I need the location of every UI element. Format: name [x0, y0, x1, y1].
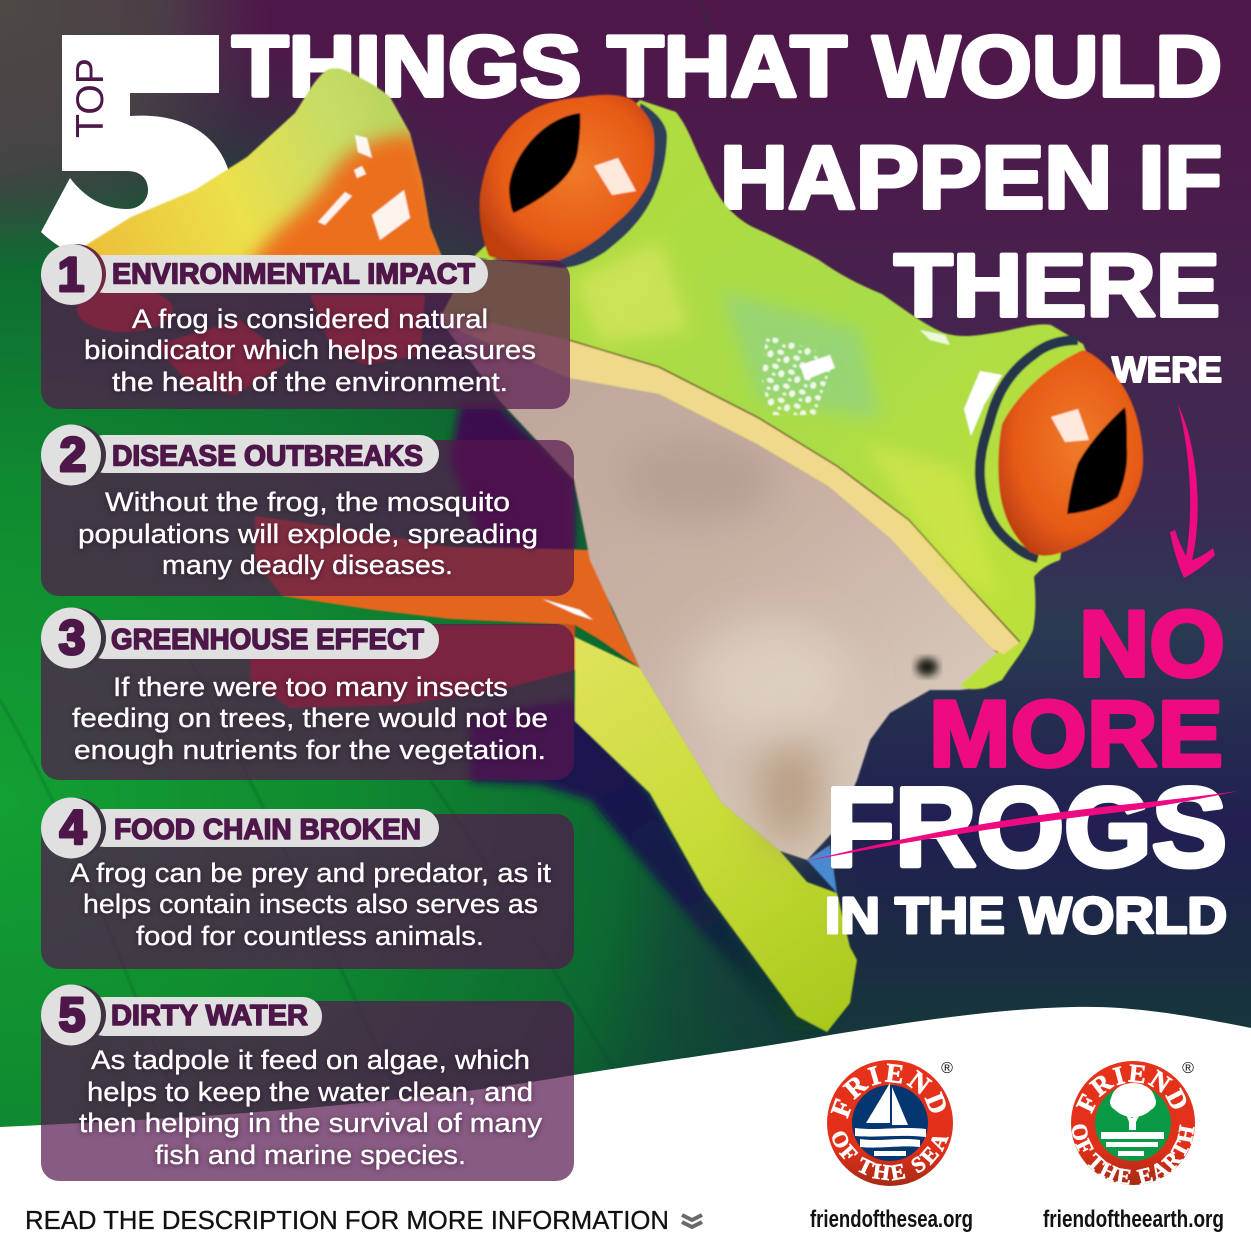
- icon: double chevron: [682, 1215, 702, 1227]
- text 5: helps to keep the water clean, and: [87, 1077, 533, 1107]
- title: [232, 19, 1222, 390]
- text 5: then helping in the survival of many: [79, 1108, 543, 1138]
- text 4: A frog can be prey and predator, as it: [70, 858, 552, 888]
- heading 4: [41, 798, 439, 858]
- panel 5: [41, 984, 574, 1181]
- call to action: FROGS: [826, 765, 1227, 890]
- logo: friend of the earth: [1071, 1060, 1195, 1185]
- title: THERE: [894, 235, 1220, 335]
- logo: friend of the sea: [827, 1060, 953, 1186]
- call to action: NO: [1079, 591, 1225, 696]
- text 4: food for countless animals.: [136, 921, 484, 951]
- heading 3: GREENHOUSE EFFECT: [111, 624, 424, 656]
- title: THINGS THAT WOULD: [232, 19, 1222, 115]
- website links: [810, 1206, 1224, 1233]
- text 4: helps contain insects also serves as: [83, 889, 538, 919]
- logo: friend of the sea: OF THE SEA: [832, 1131, 949, 1181]
- text 2: many deadly diseases.: [162, 550, 453, 580]
- text 2: populations will explode, spreading: [78, 519, 538, 549]
- text 1: A frog is considered natural: [132, 304, 488, 334]
- text 3: enough nutrients for the vegetation.: [74, 735, 546, 765]
- footer note: READ THE DESCRIPTION FOR MORE INFORMATION: [25, 1205, 669, 1235]
- call to action: IN THE WORLD: [825, 887, 1227, 944]
- bottom white wave: [0, 1007, 1251, 1251]
- left eye: [470, 95, 667, 268]
- heading 1: 1: [58, 249, 84, 302]
- panel 2: [41, 424, 574, 596]
- big numeral 5 with TOP label: TOP: [69, 58, 112, 138]
- frog arm: [575, 637, 857, 1032]
- right eye: [980, 340, 1143, 558]
- text 5: fish and marine species.: [155, 1140, 466, 1170]
- arrow: [1170, 405, 1215, 578]
- frog foot: [77, 68, 460, 395]
- text 3: [72, 672, 548, 765]
- text 3: feeding on trees, there would not be: [72, 703, 548, 733]
- text 5: As tadpole it feed on algae, which: [91, 1045, 530, 1075]
- text 5: [79, 1045, 543, 1170]
- heading 3: [41, 608, 439, 668]
- logo: friend of the earth: ®: [1182, 1060, 1194, 1077]
- big numeral 5 with TOP label: [41, 35, 232, 265]
- heading 2: DISEASE OUTBREAKS: [112, 440, 423, 472]
- text 2: Without the frog, the mosquito: [105, 487, 510, 517]
- heading 5: [41, 984, 322, 1046]
- heading 2: [41, 424, 439, 486]
- panel 1: [41, 244, 570, 409]
- frog throat: [440, 320, 1010, 893]
- heading 1: ENVIRONMENTAL IMPACT: [112, 258, 475, 290]
- text 3: If there were too many insects: [113, 672, 508, 702]
- title: HAPPEN IF: [720, 127, 1222, 227]
- logo: friend of the sea: FRIEND: [830, 1063, 946, 1119]
- heading 5: 5: [59, 989, 85, 1042]
- panel 3: [41, 608, 574, 780]
- panel 4: [41, 798, 574, 969]
- frog head: [440, 100, 1090, 689]
- heading 3: 3: [59, 612, 85, 665]
- dark shadow beside the arm: [450, 405, 827, 1032]
- heading 4: FOOD CHAIN BROKEN: [114, 814, 421, 846]
- text 1: bioindicator which helps measures: [84, 335, 536, 365]
- call to action: [807, 591, 1238, 944]
- call to action: MORE: [929, 681, 1223, 786]
- logo: friend of the earth: OF THE EARTH: [1072, 1124, 1195, 1185]
- logo: friend of the earth: FRIEND: [1076, 1064, 1186, 1114]
- text 2: [78, 487, 538, 580]
- heading 2: 2: [60, 429, 86, 482]
- heading 4: 4: [60, 802, 87, 855]
- text 4: [70, 858, 552, 951]
- text 1: the health of the environment.: [112, 367, 508, 397]
- frog photo illustration: [77, 68, 1143, 1032]
- logo: friend of the sea: ®: [941, 1060, 953, 1077]
- frog lower hand: [250, 516, 640, 708]
- title: WERE: [1112, 349, 1222, 390]
- text 1: [84, 304, 536, 397]
- heading 5: DIRTY WATER: [111, 1000, 308, 1032]
- heading 1: [41, 244, 488, 305]
- website links: friendofthesea.org: [810, 1206, 973, 1233]
